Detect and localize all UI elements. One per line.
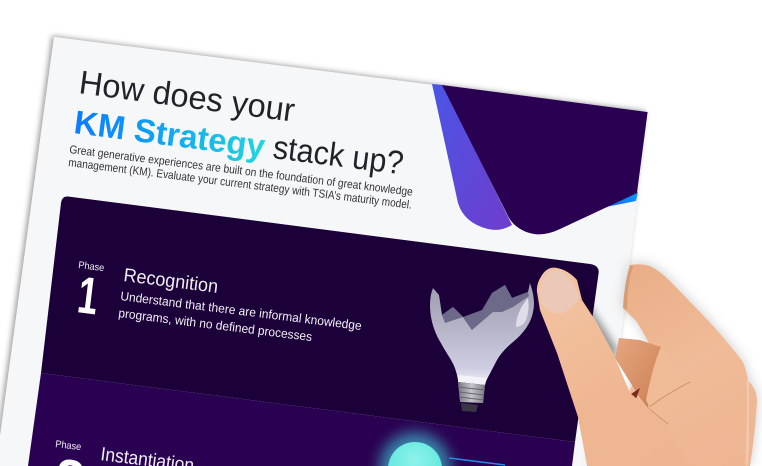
bulb glass (430, 283, 534, 383)
accent line (449, 458, 505, 465)
phase 1 description: programs, with no defined processes (118, 306, 313, 344)
dark purple shape (442, 85, 648, 234)
intro text: management (KM). Evaluate your current strategy with TSIA’s maturity model. (68, 156, 413, 212)
title highlight: KM Strategy: KM Strategy (72, 103, 268, 165)
icon: broken light bulb (430, 283, 534, 412)
bulb screw base (458, 382, 485, 403)
finger tip shading (623, 265, 633, 310)
thumb nail (540, 270, 580, 314)
phase 1 label: Phase (78, 260, 105, 274)
thumb (536, 268, 651, 466)
panel: phase 1 (41, 196, 599, 442)
inner palm fold (615, 338, 661, 408)
thumb cast shadow (584, 300, 618, 362)
phase 1 description: Understand that there are informal knowledge (120, 289, 363, 333)
decorative corner shape (432, 84, 648, 234)
crease shadow (631, 388, 640, 399)
icon: glowing orb (379, 432, 451, 466)
phase 2 label: Phase (55, 439, 82, 453)
hand (537, 264, 757, 466)
title line 2 end: stack up? (271, 128, 406, 181)
phase 1 number: 1 (75, 266, 101, 326)
phase 2 content (52, 439, 195, 466)
bulb inner back (442, 285, 529, 330)
bulb neck (458, 375, 487, 385)
bulb highlight (516, 298, 529, 327)
paper sheet (0, 37, 647, 466)
panel: phase 2 (28, 373, 575, 466)
hand edge highlight (746, 381, 749, 466)
title (75, 70, 404, 178)
phase 1 content (75, 260, 363, 344)
blue ribbon (606, 192, 638, 207)
violet ribbon (432, 84, 512, 230)
hand back and finger (618, 258, 762, 466)
title line 1: How does your (77, 63, 297, 129)
intro text: Great generative experiences are built on the foundation of great knowledge (69, 143, 414, 199)
bulb contact (461, 403, 478, 412)
palm highlight (646, 347, 661, 405)
palm crease (648, 382, 690, 424)
phase 1 heading: Recognition (122, 265, 219, 298)
